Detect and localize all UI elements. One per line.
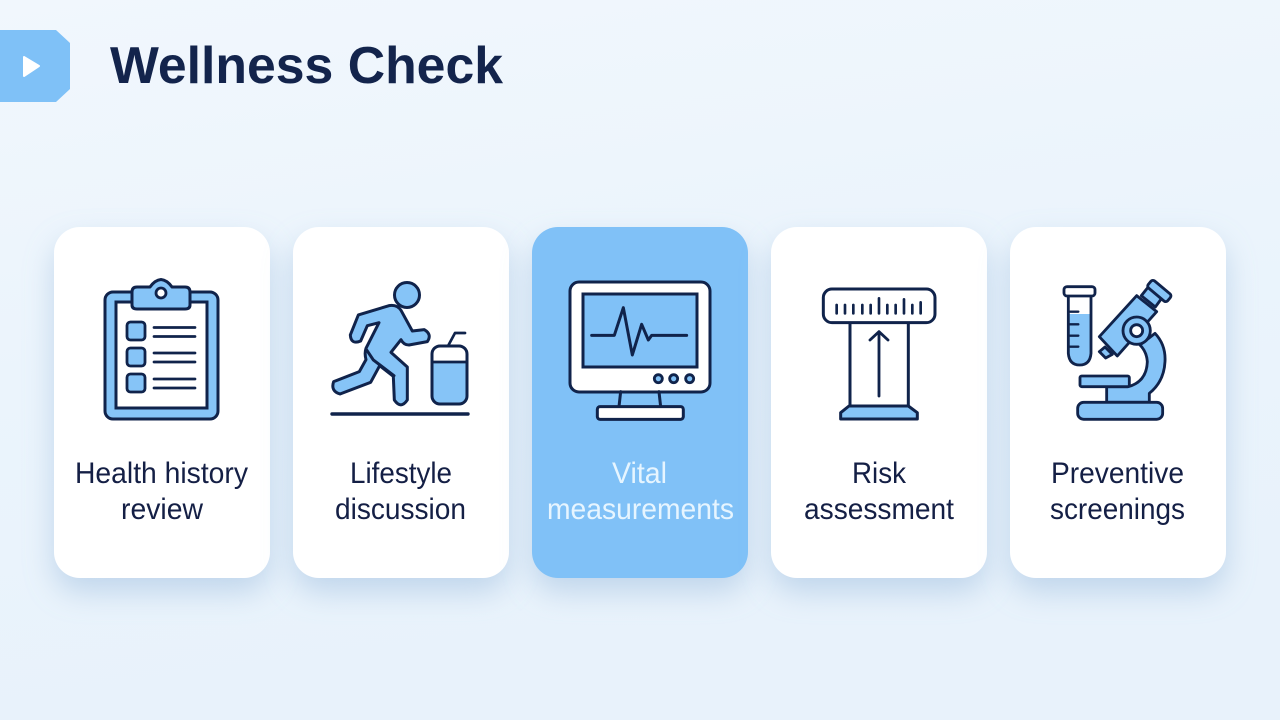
header badge with play icon [0, 30, 70, 102]
panel: risk assessment [771, 227, 987, 578]
panel: health history review [54, 227, 270, 578]
label: Lifestyle [350, 457, 452, 490]
label [1050, 457, 1185, 526]
title: Wellness Check [110, 37, 503, 95]
panel: preventive screenings [1010, 227, 1226, 578]
label [75, 457, 248, 526]
label: discussion [335, 493, 466, 526]
icon: test tube and microscope [1064, 279, 1172, 419]
icon: clipboard [105, 280, 218, 419]
label: Vital [612, 457, 667, 490]
label: assessment [804, 493, 955, 526]
label [335, 457, 466, 526]
icon: height gauge [823, 289, 935, 419]
icon: runner with drink [332, 282, 468, 414]
label: Health history [75, 457, 248, 490]
label: measurements [547, 493, 734, 526]
label [804, 457, 955, 526]
icon: heart monitor [570, 282, 710, 419]
label [547, 457, 734, 526]
panel: vital measurements (highlighted) [532, 227, 748, 578]
label: Risk [852, 457, 907, 490]
label: Preventive [1051, 457, 1184, 490]
label: review [121, 493, 203, 526]
label: screenings [1050, 493, 1185, 526]
panel: lifestyle discussion [293, 227, 509, 578]
